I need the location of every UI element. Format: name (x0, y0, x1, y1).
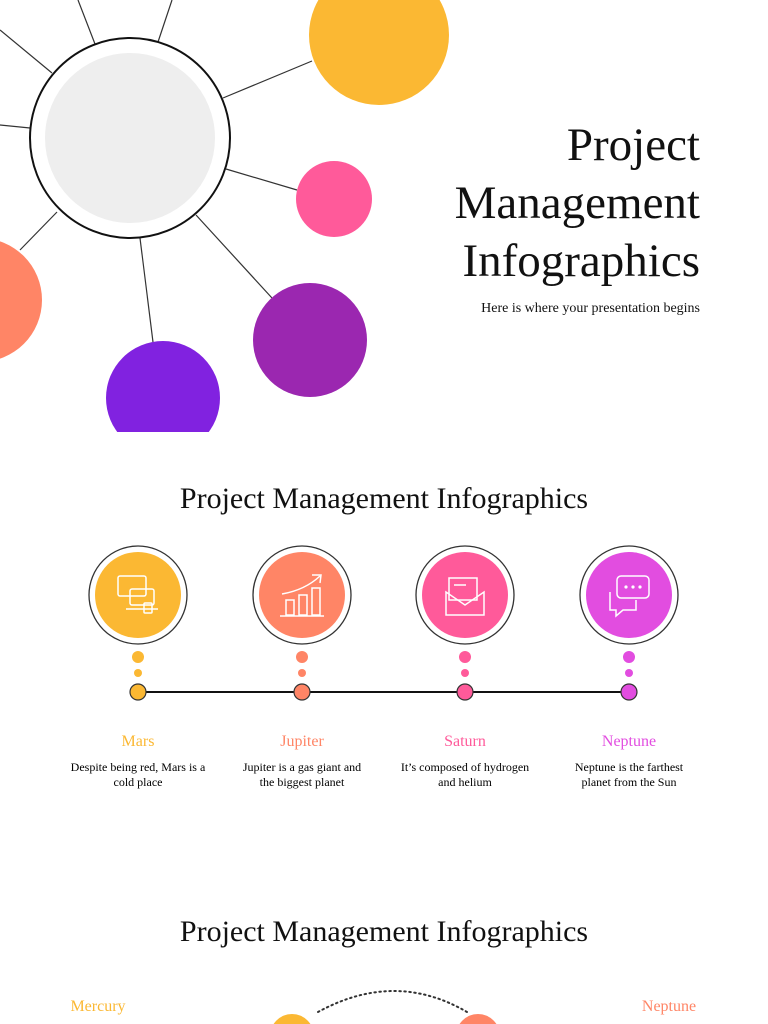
label: Neptune bottom: Neptune (642, 998, 696, 1015)
section 3 heading: Project Management Infographics (180, 915, 588, 948)
label: Saturn (401, 733, 529, 789)
label: Saturn: It’s composed of hydrogen and helium (401, 760, 529, 789)
label: Jupiter: Jupiter is a gas giant and the biggest planet (243, 760, 361, 789)
step: Mars (89, 546, 187, 700)
label: Mars (71, 733, 206, 789)
label: Mars: Despite being red, Mars is a cold place (71, 760, 205, 789)
step: Saturn (416, 546, 514, 700)
label: Jupiter (243, 733, 361, 789)
title (455, 119, 700, 287)
title: Infographics (462, 235, 700, 287)
label: Mars: Mars (122, 733, 154, 750)
label: Neptune: Neptune is the farthest planet from the Sun (575, 760, 683, 789)
label: Saturn: Saturn (444, 733, 486, 750)
label: Neptune (575, 733, 683, 789)
title: Project (567, 119, 700, 171)
timeline (88, 545, 679, 701)
planet circles (0, 0, 449, 455)
dotted arc diagram (274, 990, 496, 1024)
label: Mercury: Mercury (70, 998, 126, 1015)
section 2 heading: Project Management Infographics (180, 482, 588, 515)
hub circle (30, 38, 230, 238)
label: Jupiter: Jupiter (280, 733, 324, 750)
step: Jupiter (253, 546, 351, 700)
subtitle: Here is where your presentation begins (481, 301, 700, 316)
title: Management (455, 177, 700, 229)
hero graphic: hub and spokes (0, 0, 449, 432)
label: Neptune: Neptune (602, 733, 656, 750)
step: Neptune (580, 546, 678, 700)
